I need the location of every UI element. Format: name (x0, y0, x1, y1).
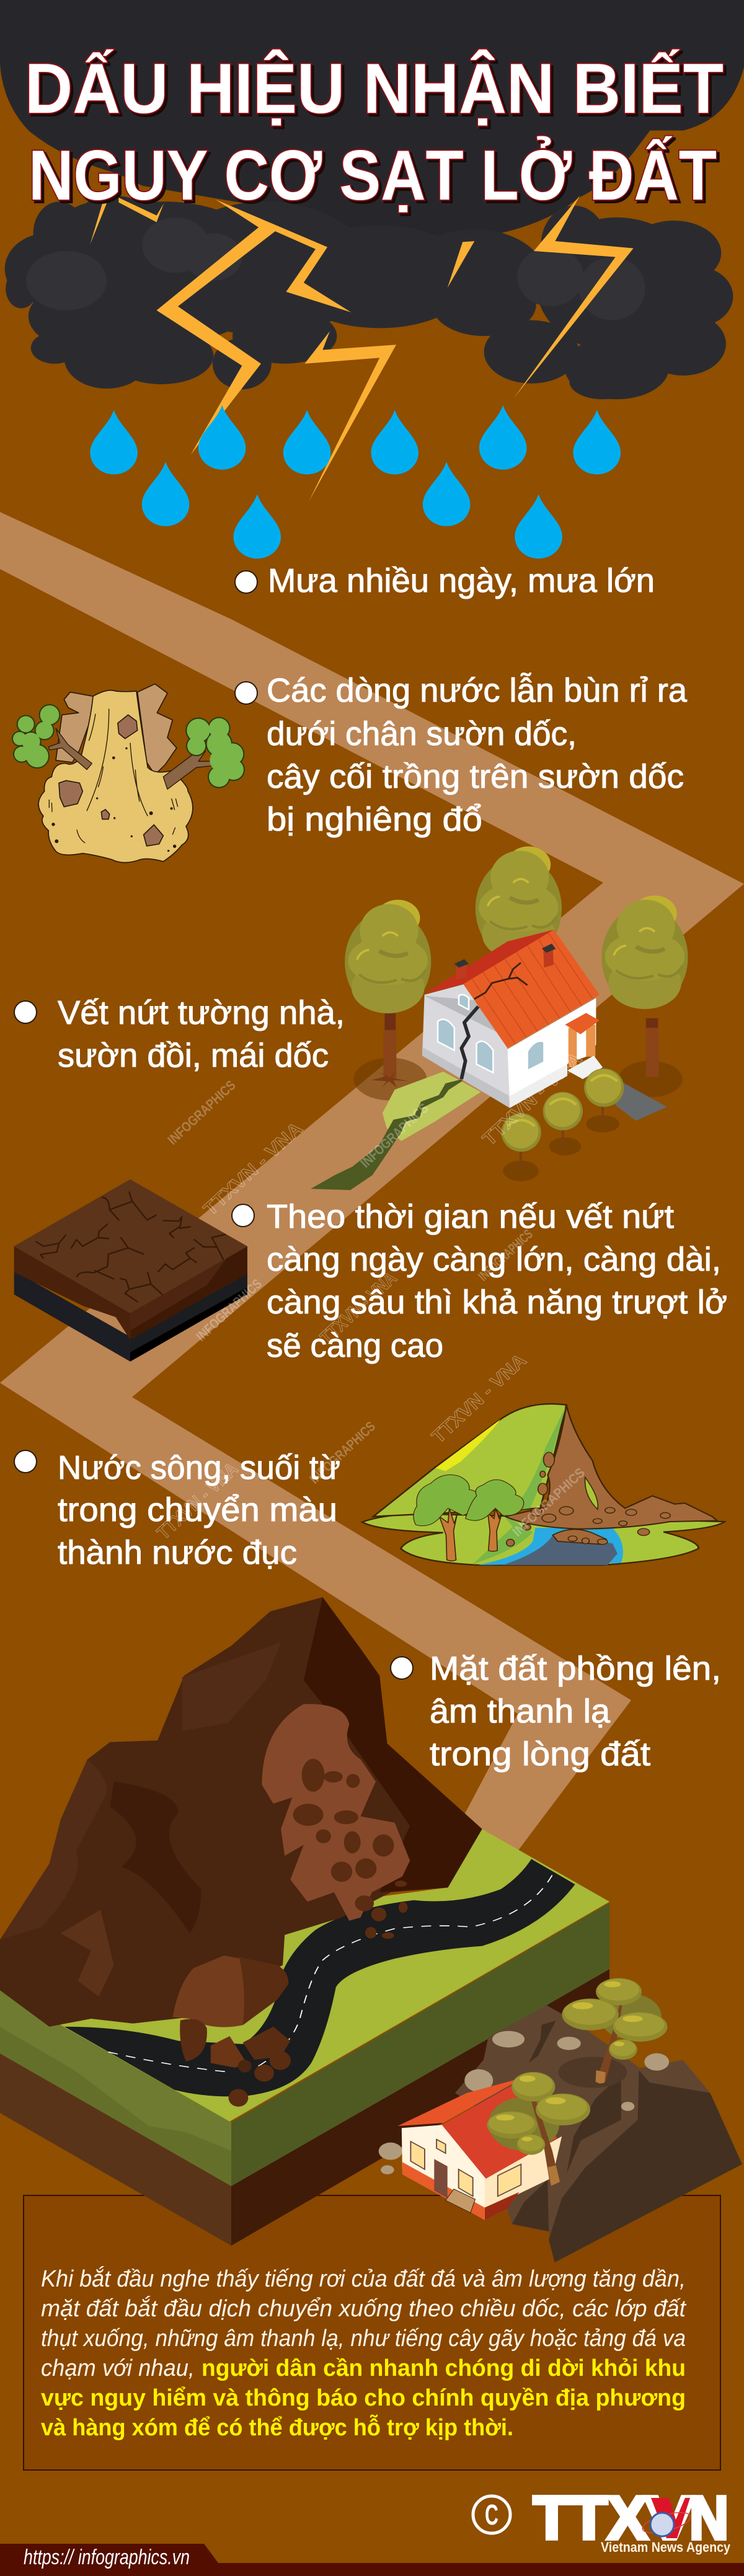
logo TTXVN: TTX (533, 2484, 648, 2552)
illustration: cracked soil block (14, 1180, 247, 1362)
item: cracks in walls: Vết nứt tường nhà, (58, 994, 345, 1031)
boulders (379, 2031, 669, 2174)
watermarks (153, 1048, 588, 1543)
note text: mặt đất bắt đầu dịch chuyển xuống theo chiều dốc, các lớp đất (41, 2295, 686, 2322)
grey mat (615, 1081, 667, 1121)
watermarks: TTXVN - VNA (479, 1048, 586, 1150)
item: muddy water: bị nghiêng đổ (267, 801, 482, 838)
footer url: https:// infographics.vn (24, 2546, 190, 2569)
copyright mark: C (485, 2499, 498, 2531)
road (64, 1859, 575, 2096)
note text: người dân cần nhanh chóng di dời khỏi khu (202, 2355, 686, 2381)
note text: thụt xuống, những âm thanh lạ, như tiếng cây gãy hoặc tảng đá va (41, 2326, 686, 2352)
note panel (24, 2195, 720, 2470)
item: river turns turbid (14, 1449, 340, 1571)
illustration: hill with river (362, 1404, 725, 1565)
item: muddy water (235, 672, 688, 838)
watermarks: TTXVN - VNA (153, 1458, 242, 1543)
item: bulging ground: Mặt đất phồng lên, (430, 1650, 721, 1687)
wall crack (461, 1007, 478, 1079)
watermarks: INFOGRAPHICS (509, 1465, 588, 1540)
house walls (422, 984, 510, 1108)
mountain (0, 1597, 482, 2027)
boulder (173, 1956, 288, 2027)
logo TTXVN (533, 2484, 731, 2555)
illustration: rock, cottage and pines (379, 1978, 742, 2262)
tree shadows (353, 1058, 683, 1100)
item: bulging ground: trong lòng đất (430, 1736, 650, 1773)
note text: chạm với nhau, (41, 2355, 195, 2381)
pine back canopies (600, 1994, 662, 2039)
watermarks: INFOGRAPHICS (193, 1276, 265, 1344)
watermarks: TTXVN - VNA (428, 1350, 530, 1447)
item: cracks grow over time: càng sâu thì khả năng trượt lở (267, 1284, 727, 1321)
item: cracks in walls: sườn đồi, mái dốc (58, 1037, 329, 1074)
trees (440, 1508, 503, 1561)
rain drops (90, 405, 621, 558)
illustration: ground block sides (0, 1903, 609, 2246)
illustration: mountain landslide and road (0, 1597, 609, 2122)
note text: vực nguy hiểm và thông báo cho chính quyền địa phương (41, 2385, 686, 2411)
illustration: cracked house with trees (311, 847, 688, 1190)
river (478, 1528, 623, 1565)
slide (505, 1405, 717, 1529)
item: river turns turbid: Nước sông, suối từ (58, 1449, 340, 1486)
watermarks: INFOGRAPHICS (164, 1077, 239, 1148)
item: muddy water: dưới chân sườn dốc, (267, 715, 577, 752)
item: muddy water: Các dòng nước lẫn bùn rỉ ra (267, 672, 688, 709)
windows (438, 995, 544, 1073)
item: heavy rain: Mưa nhiều ngày, mưa lớn (268, 562, 655, 599)
bushes (586, 1116, 619, 1132)
copyright mark (473, 2496, 510, 2533)
watermarks: TTXVN - VNA (316, 1268, 401, 1348)
cottage (402, 2125, 486, 2220)
title (25, 50, 724, 215)
green patch (383, 1072, 481, 1141)
item: bulging ground (391, 1650, 721, 1773)
rock (455, 2005, 742, 2262)
porch (569, 1026, 595, 1060)
roof (425, 930, 554, 994)
logo TTXVN: V (645, 2484, 694, 2552)
item: river turns turbid: trong chuyển màu (58, 1491, 337, 1528)
note text (41, 2265, 686, 2441)
item: cracks grow over time: Theo thời gian nếu vết nứt (267, 1198, 674, 1235)
watermarks: INFOGRAPHICS (306, 1418, 378, 1487)
note text: Khi bắt đầu nghe thấy tiếng rơi của đất đá và âm lượng tăng dần, (41, 2265, 686, 2292)
item: bulging ground: âm thanh lạ (430, 1693, 611, 1730)
item: muddy water: cây cối trồng trên sườn dốc (267, 758, 684, 795)
watermarks: INFOGRAPHICS (357, 1100, 432, 1171)
storm clouds (0, 0, 744, 399)
ground crack (311, 1079, 462, 1190)
item: cracks grow over time: sẽ càng cao (267, 1327, 443, 1364)
chimneys (456, 963, 466, 980)
watermarks: TTXVN - VNA (200, 1118, 307, 1220)
icon: landslide with trees (12, 684, 245, 863)
item: cracks grow over time (232, 1198, 727, 1364)
note text: và hàng xóm để có thể được hỗ trợ kịp thời. (41, 2414, 513, 2441)
logo TTXVN: N (689, 2484, 728, 2552)
item: river turns turbid: thành nước đục (58, 1534, 297, 1571)
item: cracks grow over time: càng ngày càng lớn, càng dài, (267, 1241, 721, 1278)
footer band (0, 2544, 744, 2576)
slide debris (262, 1704, 410, 1921)
bench (446, 2189, 475, 2213)
watermarks: INFOGRAPHICS (475, 1226, 536, 1284)
pine trees (596, 2003, 622, 2083)
lightning bolts (90, 196, 634, 502)
item: cracks in walls (14, 994, 345, 1074)
logo TTXVN: Vietnam News Agency (601, 2539, 731, 2555)
winding road path (0, 512, 744, 1850)
